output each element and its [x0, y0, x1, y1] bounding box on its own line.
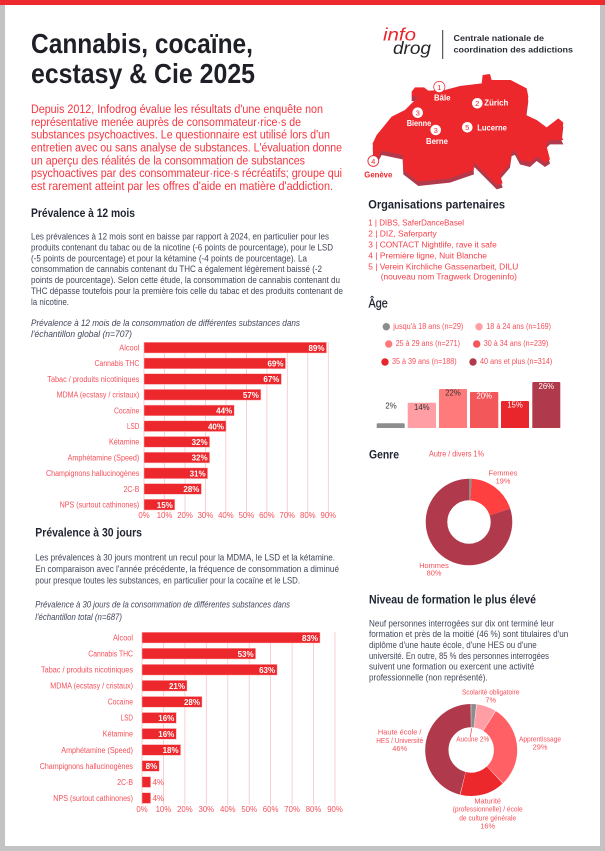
- bar chart: prévalence à 30 jours: 28%: [184, 698, 200, 707]
- chart caption: 12 mois: l'échantillon global (n=707): [31, 329, 132, 339]
- bar chart: prévalence à 12 mois: 57%: [243, 391, 259, 400]
- text: prévalence à 30 jours: En comparaison avec l'année précédente, la fréquence de consommation a diminué: [35, 564, 339, 574]
- intro text: entretien avec ou sans analyse de substances. L'évaluation donne: [31, 140, 342, 154]
- donut chart: genre: Hommes: [419, 561, 449, 570]
- text: prévalence à 12 mois: la nicotine.: [31, 297, 69, 307]
- logo: infodrog: drog: [393, 38, 431, 58]
- bar chart: prévalence à 12 mois: 40%: [208, 422, 224, 431]
- map: Switzerland with partner locations: Bâle: [434, 94, 451, 102]
- bar chart: prévalence à 12 mois: 15%: [157, 501, 173, 510]
- bar chart: prévalence à 30 jours: NPS (surtout cathinones): [53, 794, 133, 803]
- bar chart: prévalence à 30 jours: 2C-B: [117, 778, 133, 787]
- legend: âge: 35 à 39 ans (n=188): [392, 357, 457, 366]
- bar chart: prévalence à 30 jours: Amphétamine (Speed): [61, 746, 133, 755]
- bar chart: prévalence à 12 mois: 69%: [267, 360, 284, 368]
- donut chart: niveau de formation: Apprentissage: [519, 735, 561, 744]
- bar chart: âge: 14%: [414, 403, 430, 412]
- text: niveau de formation: suivent une formation ou exercent une activité: [369, 662, 534, 672]
- text: prévalence à 12 mois: points de pourcentage). Selon cette étude, la consommation de cannabis contenant du: [31, 275, 340, 285]
- map: Switzerland with partner locations: [364, 74, 563, 189]
- donut chart: niveau de formation: 46%: [392, 744, 408, 753]
- list: organisations partenaires: [368, 218, 518, 281]
- bar chart: âge: 20%: [476, 392, 492, 401]
- legend: âge: 30 à 34 ans (n=239): [484, 339, 549, 348]
- bar chart: prévalence à 12 mois: Cannabis THC: [95, 359, 140, 368]
- bar chart: prévalence à 12 mois: 32%: [192, 438, 208, 447]
- chart caption: 12 mois: Prévalence à 12 mois de la consommation de différentes substances dans: [31, 318, 301, 328]
- list: organisations partenaires: 4 | Première ligne, Nuit Blanche: [368, 251, 487, 261]
- text: niveau de formation: professionnelle (non représenté).: [369, 673, 488, 683]
- text: niveau de formation: université. En outre, 85 % des personnes interrogées: [369, 651, 550, 661]
- bar chart: prévalence à 12 mois: Kétamine: [109, 438, 139, 447]
- map: Switzerland with partner locations: 5: [465, 123, 469, 132]
- bar chart: prévalence à 30 jours: 40%: [220, 805, 236, 814]
- heading: niveau de formation: Niveau de formation le plus élevé: [369, 592, 536, 606]
- bar chart: prévalence à 30 jours: 0%: [136, 805, 148, 814]
- map: Switzerland with partner locations: Berne: [426, 137, 448, 146]
- map: Switzerland with partner locations: Bienne: [407, 119, 432, 128]
- bar chart: prévalence à 12 mois: Champignons hallucinogènes: [46, 469, 139, 478]
- donut chart: niveau de formation: (professionnelle) / école: [453, 805, 523, 814]
- heading: genre: Genre: [369, 447, 399, 461]
- bar chart: prévalence à 30 jours: 20%: [177, 805, 193, 814]
- intro text: un aperçu des réalités de la consommation de substances: [31, 154, 305, 168]
- logo: infodrog: info: [383, 24, 416, 44]
- legend: âge: 18 à 24 ans (n=169): [486, 322, 551, 331]
- map: Switzerland with partner locations: Zürich: [484, 99, 508, 108]
- logo: infodrog: Centrale nationale de: [454, 33, 544, 43]
- bar chart: prévalence à 30 jours: 18%: [163, 746, 179, 755]
- bar chart: prévalence à 12 mois: 2C-B: [124, 485, 139, 494]
- bar chart: prévalence à 12 mois: [46, 342, 336, 520]
- bar chart: prévalence à 12 mois: Cocaïne: [114, 406, 139, 415]
- donut chart: niveau de formation: de culture générale: [459, 814, 516, 823]
- map: Switzerland with partner locations: 3: [416, 108, 420, 118]
- bar chart: prévalence à 30 jours: Champignons hallucinogènes: [40, 762, 133, 771]
- text: niveau de formation: Neuf personnes interrogées sur dix ont terminé leur: [369, 619, 554, 629]
- donut chart: niveau de formation: Aucune 2%: [456, 734, 490, 743]
- bar chart: prévalence à 30 jours: 83%: [302, 634, 318, 643]
- donut chart: genre: [419, 450, 518, 578]
- donut chart: genre: Autre / divers 1%: [429, 450, 484, 459]
- bar chart: prévalence à 30 jours: 50%: [241, 805, 257, 814]
- text: prévalence à 30 jours: [35, 553, 339, 585]
- bar chart: prévalence à 12 mois: 31%: [190, 469, 206, 478]
- legend: âge: [381, 322, 553, 366]
- text: prévalence à 30 jours: Les prévalences à 30 jours montrent un recul pour la MDMA, le LSD et la kétamine.: [35, 553, 335, 563]
- bar chart: prévalence à 12 mois: MDMA (ecstasy / cristaux): [57, 391, 140, 400]
- list: organisations partenaires: 1 | DIBS, SaferDanceBasel: [368, 218, 464, 228]
- bar chart: prévalence à 12 mois: 10%: [157, 511, 172, 520]
- bar chart: prévalence à 12 mois: 40%: [218, 511, 234, 520]
- bar chart: prévalence à 12 mois: 70%: [279, 511, 295, 520]
- bar chart: prévalence à 12 mois: 20%: [177, 511, 193, 520]
- heading: prévalence à 30 jours: Prévalence à 30 jours: [35, 526, 142, 540]
- bar chart: prévalence à 30 jours: MDMA (ecstasy / cristaux): [50, 682, 133, 691]
- text: prévalence à 12 mois: consommation de cannabis contenant du THC a également légèrement baissé (-2: [31, 264, 322, 274]
- chart caption: 12 mois: [31, 318, 301, 339]
- map: Switzerland with partner locations: 1: [437, 83, 441, 92]
- bar chart: prévalence à 30 jours: 90%: [327, 805, 343, 814]
- title: ecstasy & Cie 2025: [31, 58, 255, 89]
- bar chart: prévalence à 30 jours: 53%: [238, 650, 254, 659]
- text: prévalence à 12 mois: produits contenant du tabac ou de la nicotine (-6 points de pourcentage), pour le LSD: [31, 242, 333, 252]
- bar chart: prévalence à 30 jours: 4%: [152, 794, 164, 803]
- bar chart: prévalence à 30 jours: Kétamine: [103, 730, 133, 739]
- title: [31, 28, 255, 89]
- bar chart: prévalence à 30 jours: Cannabis THC: [88, 650, 133, 658]
- bar chart: prévalence à 30 jours: 16%: [158, 714, 174, 723]
- intro text: [31, 102, 342, 193]
- text: niveau de formation: formation et près de la moitié (46 %) sont titulaires d'un: [369, 629, 568, 639]
- logo: infodrog: [383, 24, 573, 59]
- bar chart: prévalence à 30 jours: 8%: [146, 762, 157, 771]
- list: organisations partenaires: 5 | Verein Kirchliche Gassenarbeit, DILU: [368, 261, 518, 271]
- donut chart: niveau de formation: Scolarité obligatoire: [462, 687, 519, 696]
- title: Cannabis, cocaïne,: [31, 28, 253, 59]
- donut chart: niveau de formation: 29%: [533, 742, 548, 751]
- bar chart: prévalence à 30 jours: 4%: [152, 778, 164, 787]
- chart caption: 30 jours: l'échantillon total (n=687): [35, 612, 122, 622]
- bar chart: prévalence à 30 jours: 16%: [158, 730, 174, 739]
- bar chart: prévalence à 12 mois: 44%: [216, 407, 232, 416]
- bar chart: prévalence à 30 jours: 63%: [259, 666, 275, 675]
- bar chart: prévalence à 30 jours: Alcool: [113, 634, 133, 642]
- heading: prévalence à 12 mois: Prévalence à 12 mois: [31, 206, 135, 220]
- intro text: est rarement atteint par les offres d'aide en matière d'addiction.: [31, 179, 333, 193]
- bar chart: âge: 26%: [538, 382, 554, 391]
- bar chart: prévalence à 12 mois: NPS (surtout cathinones): [60, 500, 140, 510]
- bar chart: prévalence à 30 jours: 80%: [306, 805, 321, 814]
- bar chart: prévalence à 12 mois: 0%: [138, 511, 150, 520]
- donut chart: genre: 80%: [427, 569, 442, 578]
- bar chart: âge: 15%: [507, 401, 523, 410]
- intro text: substances psychoactives. Le questionnaire est utilisé lors d'un: [31, 128, 330, 142]
- map: Switzerland with partner locations: Lucerne: [477, 124, 507, 132]
- heading: âge: Âge: [368, 296, 388, 311]
- logo: infodrog: coordination des addictions: [454, 44, 573, 54]
- map: Switzerland with partner locations: 3: [434, 126, 438, 135]
- text: prévalence à 30 jours: pour presque toutes les substances, en particulier pour la cocaïne et le LSD.: [35, 575, 300, 585]
- donut chart: niveau de formation: 7%: [485, 695, 496, 704]
- chart caption: 30 jours: [35, 600, 291, 622]
- bar chart: prévalence à 12 mois: 67%: [263, 375, 279, 384]
- bar chart: prévalence à 30 jours: [40, 632, 343, 814]
- bar chart: prévalence à 12 mois: 60%: [259, 511, 275, 520]
- bar chart: prévalence à 12 mois: 80%: [300, 511, 316, 520]
- bar chart: prévalence à 30 jours: Tabac / produits nicotiniques: [41, 666, 133, 675]
- donut chart: genre: 19%: [496, 477, 511, 486]
- bar chart: âge: 2%: [385, 401, 397, 410]
- donut chart: niveau de formation: 16%: [480, 822, 496, 831]
- donut chart: niveau de formation: [376, 687, 561, 831]
- intro text: représentative menée auprès de consommateur·rice·s de: [31, 115, 301, 129]
- list: organisations partenaires: (nouveau nom Tragwerk Drogeninfo): [381, 271, 517, 281]
- bar chart: prévalence à 30 jours: Cocaïne: [108, 698, 133, 707]
- text: prévalence à 12 mois: THC dépasse toutefois pour la première fois celle du tabac et des produits contenant de: [31, 286, 343, 296]
- text: niveau de formation: diplôme d'une haute école, d'une HES ou d'une: [369, 640, 537, 650]
- bar chart: prévalence à 12 mois: 30%: [198, 511, 213, 520]
- bar chart: âge: 22%: [445, 389, 461, 398]
- bar chart: prévalence à 30 jours: 70%: [284, 805, 300, 814]
- bar chart: prévalence à 12 mois: 28%: [183, 485, 199, 494]
- bar chart: prévalence à 12 mois: LSD: [127, 422, 140, 431]
- bar chart: prévalence à 30 jours: LSD: [121, 714, 133, 723]
- bar chart: prévalence à 12 mois: Amphétamine (Speed): [68, 453, 140, 462]
- bar chart: prévalence à 30 jours: 21%: [169, 682, 185, 691]
- intro text: Depuis 2012, Infodrog évalue les résultats d'une enquête non: [31, 102, 323, 116]
- donut chart: genre: Femmes: [489, 469, 518, 478]
- heading: organisations partenaires: Organisations partenaires: [368, 197, 505, 211]
- map: Switzerland with partner locations: Genève: [364, 171, 393, 180]
- text: niveau de formation: [369, 619, 568, 683]
- list: organisations partenaires: 3 | CONTACT Nightlife, rave it safe: [368, 240, 497, 250]
- bar chart: prévalence à 12 mois: 89%: [308, 344, 324, 353]
- legend: âge: 40 ans et plus (n=314): [480, 357, 553, 366]
- bar chart: prévalence à 12 mois: Tabac / produits nicotiniques: [47, 375, 139, 384]
- donut chart: niveau de formation: Haute école /: [378, 727, 422, 736]
- bar chart: prévalence à 12 mois: 90%: [320, 511, 336, 520]
- map: Switzerland with partner locations: 2: [475, 99, 479, 108]
- donut chart: niveau de formation: HES / Université: [376, 736, 423, 745]
- donut chart: niveau de formation: Maturité: [474, 796, 501, 805]
- intro text: psychoactives par des consommateur·rice·s récréatifs; groupe qui: [31, 166, 342, 180]
- map: Switzerland with partner locations: 4: [371, 157, 375, 166]
- text: prévalence à 12 mois: (-5 points de pourcentage) et pour la kétamine (-4 points de pourcentage). La: [31, 253, 307, 263]
- chart caption: 30 jours: Prévalence à 30 jours de la consommation de différentes substances dans: [35, 600, 291, 610]
- bar chart: prévalence à 30 jours: 10%: [156, 805, 171, 814]
- legend: âge: 25 à 29 ans (n=271): [396, 339, 460, 348]
- text: prévalence à 12 mois: Les prévalences à 12 mois sont en baisse par rapport à 2024, en particulier pour les: [31, 232, 330, 242]
- bar chart: prévalence à 30 jours: 30%: [198, 805, 214, 814]
- bar chart: prévalence à 30 jours: 60%: [263, 805, 278, 814]
- legend: âge: jusqu'à 18 ans (n=29): [392, 322, 464, 331]
- bar chart: âge: [377, 382, 560, 428]
- bar chart: prévalence à 12 mois: Alcool: [119, 344, 140, 352]
- bar chart: prévalence à 12 mois: 32%: [192, 454, 208, 463]
- bar chart: prévalence à 12 mois: 50%: [239, 511, 254, 520]
- text: prévalence à 12 mois: [31, 232, 343, 307]
- list: organisations partenaires: 2 | DIZ, Saferparty: [368, 229, 437, 239]
